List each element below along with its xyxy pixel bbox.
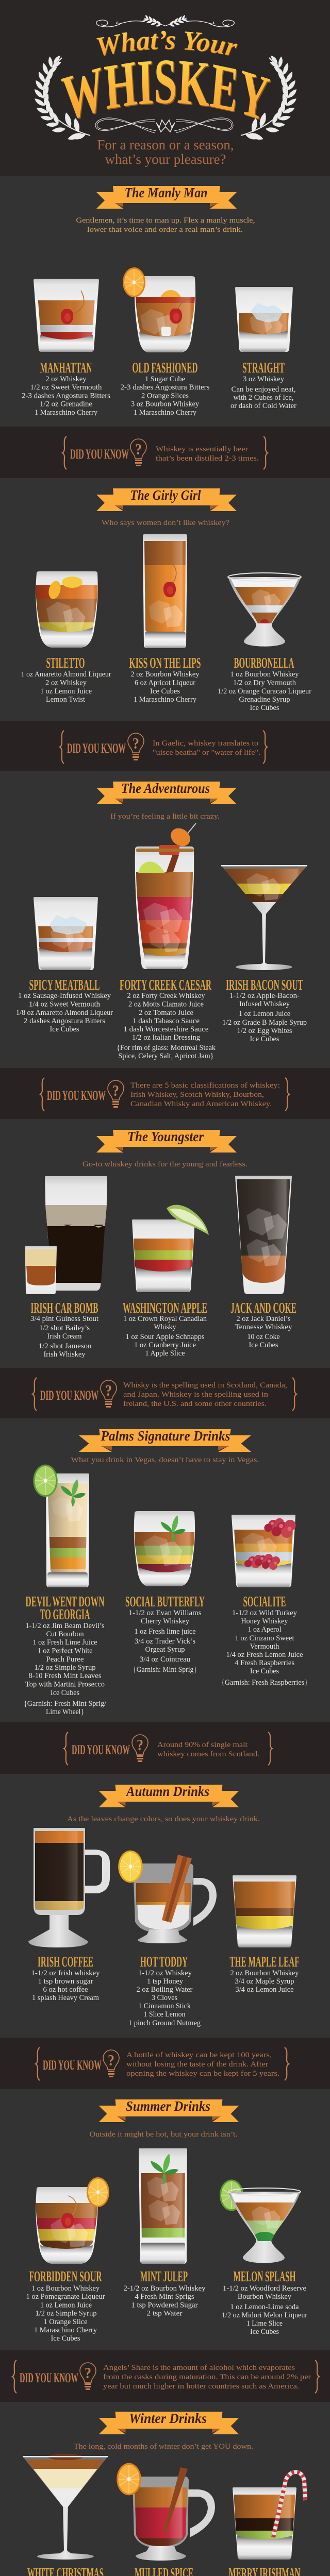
icon: Irish Bacon Sout glass [219,865,309,970]
icon: Social Butterfly glass [131,1511,199,1586]
subtitle: For a reason or a season, [97,137,234,152]
drink name: IRISH CAR BOMB [31,1300,98,1316]
callout: did you know 3 [0,1068,330,1119]
callout: did you know 5: ? [137,1736,143,1754]
panel: Winter Drinks [0,2402,330,2576]
ingredients: 1 oz Bourbon Whiskey [31,2284,100,2293]
callout: did you know 6: without losing the taste of the drink. After [126,2060,268,2069]
ingredients [218,670,311,712]
drink: Merry Irishman [221,2472,308,2576]
ingredients: 1 oz Lemon-Lime soda [230,2303,299,2311]
icon: Socialite glass [229,1515,296,1587]
callout: did you know 5: whiskey comes from Scotland. [157,1750,259,1758]
drink: Bourbonella [218,573,311,712]
ingredients: Ice Cubes [51,1689,79,1697]
ingredients [235,1315,292,1349]
panel: The Adventurous [16,782,307,1060]
title: WHISKEY: WHISKEY [61,60,271,120]
ingredients: Ice Cubes [250,1035,279,1043]
ingredients: 2 oz Motts Clamato Juice [128,1001,204,1009]
callout: did you know 6: A bottle of whiskey can be kept 100 years, [126,2051,272,2059]
ingredients: 2 oz Tomato Juice [139,1009,193,1017]
ingredients: 2 oz Forty Creek Whiskey [127,992,205,1000]
ingredients [31,1969,100,2002]
ingredients [222,992,307,1043]
ingredients: Vermouth [250,1642,279,1651]
callout: did you know 2 [0,721,330,771]
drink name: SOCIALITE [243,1594,286,1610]
callout: did you know 6: DID YOU KNOW [43,2058,102,2073]
callout: did you know 3: ? [112,1081,119,1099]
drink name: OLD FASHIONED [132,360,198,376]
ornament: lower flourish [95,118,233,133]
heading ribbon: The Girly Girl [130,487,201,503]
ingredients: 1/2 oz Orange Curacao Liqueur [218,687,311,696]
drink name: MANHATTAN [40,360,92,376]
ingredients: Ice Cubes [51,2334,80,2343]
ingredients: 2 dashes Angostura Bitters [24,1017,105,1025]
ingredients: Cut Bourbon [46,1630,84,1638]
ingredients: 1 oz Fresh Lime Juice [33,1638,97,1647]
ingredients: 2 oz Bourbon Whiskey [131,670,200,679]
icon: Straight glass [235,287,294,352]
ingredients [131,670,200,704]
ingredients: 1 splash Heavy Cream [32,1994,100,2002]
ingredients: 2-1/2 oz Bourbon Whiskey [124,2284,206,2293]
callout: did you know 6 [0,2038,330,2089]
icon: Devil Went Down glass [33,1465,93,1587]
ingredients: 1-1/2 oz Wild Turkey [232,1609,298,1617]
ingredients: 1 Maraschino Cherry [134,409,197,417]
ingredients: 1 oz Bourbon Whiskey [230,670,299,679]
callout: did you know 1: ? [135,440,142,458]
heading ribbon: Summer Drinks [126,2098,210,2114]
drink: Old Fashioned [121,267,210,417]
ingredients: 1-1/2 oz Jim Beam Devil’s [26,1622,105,1630]
ingredients: 1/2 oz Simple Syrup [34,1664,96,1672]
icon: Stiletto glass [36,571,98,648]
ingredients: Cherry Whiskey [141,1617,190,1625]
ingredients [21,670,111,704]
panel: The Manly Man [22,186,296,416]
drink: Irish Bacon Sout [219,865,309,1043]
ingredients: 1 Maraschino Cherry [134,696,197,704]
drink name: DEVIL WENT DOWN [26,1594,104,1610]
ingredients: 3/4 pint Guiness Stout [30,1315,98,1323]
icon: right laurel [241,55,298,142]
ingredients: 6 oz hot coffee [43,1986,88,1994]
icon: left laurel [33,55,90,142]
callout: did you know 5: Around 90% of single malt [157,1741,248,1749]
ingredients: 1 Cinnamon Stick [138,2002,191,2010]
panel: The Youngster [25,1130,296,1358]
ornament: top flourish [96,14,234,27]
drink: Melon Splash [220,2180,307,2336]
panel: header [0,0,330,176]
drink: Washington Apple [123,1205,209,1358]
ingredients: 1 oz Fresh lime juice [134,1628,196,1636]
drink: Irish Coffee [28,1828,110,2002]
panel: The Girly Girl [22,488,311,710]
ingredients: 1-1/2 oz Woodford Reserve [223,2284,306,2293]
ingredients: Infused Whiskey [239,1000,290,1008]
icon: Hot Toddy mug [118,1851,217,1943]
intro text: What you drink in Vegas, doesn’t have to stay in Vegas. [71,1456,259,1464]
ingredients: 1 dash Tabasco Sauce [133,1017,200,1025]
ingredients: 2 Orange Slices [141,392,189,400]
ingredients: Ice Cubes [150,687,180,696]
ingredients: Spice, Celery Salt, Apricot Jam} [119,1052,213,1060]
callout: did you know 4: DID YOU KNOW [40,1388,98,1403]
icon: Washington Apple glass [129,1205,209,1292]
heading ribbon: Palms Signature Drinks [101,1428,230,1444]
ingredients: 1 oz Pomegranate Liqueur [26,2293,105,2301]
ingredients: 1-1/2 oz Whiskey [138,1969,192,1977]
icon: Merry Irishman glass [232,2472,305,2560]
drink: Irish Car Bomb [25,1176,108,1359]
callout: did you know 4 [0,1368,330,1418]
ingredients: Ice Cubes [250,704,279,712]
ingredients: 1 tsp Powdered Sugar [131,2301,198,2309]
ingredients [22,375,110,417]
drink: Forbidden Sour [26,2177,109,2343]
callout: did you know 7: Angels’ Share is the amount of alcohol which evaporates [103,2364,295,2372]
ingredients: 3/4 oz Cointreau [140,1655,190,1664]
ingredients: 1 tsp brown sugar [38,1977,93,1986]
heading ribbon: The Youngster [127,1129,204,1144]
callout: did you know 1: Whiskey is essentially beer [156,445,248,453]
callout: did you know 7: year but much higher in hotter countries such as America. [103,2382,299,2391]
intro text: The long, cold months of winter don’t get YOU down. [74,2443,253,2451]
ingredients: 1 pinch Ground Nutmeg [128,2019,201,2027]
ingredients: 1 Apple Slice [145,1349,185,1358]
callout: did you know 7 [0,2350,330,2402]
ingredients: 2 oz Whiskey [45,375,87,383]
ingredients: 1/4 oz Fresh Lemon Juice [226,1651,303,1659]
ingredients: Irish Cream [47,1332,82,1341]
ingredients: 10 oz Coke [248,1333,279,1341]
callout: did you know 4: and Japan. Whiskey is the spelling used in [123,1391,269,1399]
subtitle: what’s your pleasure? [105,151,226,167]
ingredients: Ice Cubes [249,1341,278,1349]
drink name: SPICY MEATBALL [29,977,100,993]
ingredients: 1/4 oz Sweet Vermouth [29,1001,101,1009]
heading ribbon [79,1428,251,1452]
drink: Stiletto [21,571,111,704]
ingredients [121,375,210,417]
ingredients: {Garnish: Fresh Raspberries} [221,1679,308,1687]
ingredients [123,1315,207,1358]
drink name: MINT JULEP [140,2269,188,2285]
drink name: IRISH COFFEE [38,1954,93,1970]
intro text: lower that voice and order a real man’s drink. [87,226,243,234]
drink: Socialite [221,1515,308,1687]
heading ribbon [96,487,237,511]
ingredients: 2 tsp Water [146,2309,183,2317]
ingredients: 1/2 oz Grenadine [40,400,92,408]
heading ribbon [99,1784,239,1807]
ingredients: 3 oz Whiskey [243,375,285,383]
ingredients: 1 oz Lemon Juice [239,1010,290,1018]
icon: Irish Car Bomb glasses [25,1176,108,1294]
drink name: FORBIDDEN SOUR [29,2269,102,2285]
callout: did you know 1: DID YOU KNOW [70,447,129,462]
ingredients: 1 oz Aperol [248,1625,282,1634]
ingredients: 1 Maraschino Cherry [34,2326,97,2334]
drink name: FORTY CREEK CAESAR [120,977,211,993]
heading ribbon [96,781,237,804]
callout: did you know 7: from the casks during maturation. This can be around 2% per [103,2373,311,2381]
ingredients: 1/2 oz Midori Melon Liqueur [222,2311,307,2319]
ingredients: {Garnish: Mint Sprig} [133,1666,197,1674]
drink name [26,1594,104,1623]
drink: Social Butterfly [125,1511,205,1674]
icon: Forbidden Sour glass [31,2177,109,2264]
drink: Devil Went Down to Georgia [24,1465,107,1716]
ingredients: 1 oz Lemon Juice [40,2301,92,2309]
ingredients: 1 dash Worcesteshire Sauce [124,1025,208,1033]
icon: The Maple Leaf glass [232,1875,299,1947]
intro text [76,216,255,234]
ingredients: Top with Martini Prosecco [25,1681,105,1689]
callout: did you know 4: ? [105,1381,112,1399]
intro text: Go-to whiskey drinks for the young and fearless. [82,1160,248,1168]
callout: did you know 2: DID YOU KNOW [67,741,126,756]
ingredients: 8-10 Fresh Mint Leaves [29,1672,102,1680]
ingredients: 1 oz Perfect White [37,1647,93,1655]
icon: Spicy Meatball glass [31,897,101,970]
ingredients [24,1622,107,1716]
callout: did you know 1: that’s been distilled 2-3 times. [156,454,259,463]
drink: White Christmas [21,2454,111,2576]
ingredients: Orgeat Syrup [145,1646,185,1654]
ingredients [222,2284,307,2336]
heading ribbon: Autumn Drinks [125,1784,209,1799]
callout: did you know 3: Canadian Whisky and American Whiskey. [130,1100,272,1108]
ingredients: 1/2 oz Sweet Vermouth [30,383,102,392]
intro text: Who says women don’t like whiskey? [102,519,229,527]
heading ribbon: Winter Drinks [129,2411,207,2426]
panel: Summer Drinks [27,2099,307,2341]
ingredients: {Garnish: Fresh Mint Sprig/ [24,1700,107,1708]
drink name: HOT TODDY [140,1954,188,1970]
ingredients: 3/4 oz Trader Vick’s [135,1637,195,1646]
icon: Mulled Spice Cheribundi mug [117,2463,215,2561]
callout: did you know 4: Whisky is the spelling used in Scotland, Canada, [123,1381,287,1389]
drink name: STILETTO [46,655,85,671]
icon: Old Fashioned glass [123,267,199,352]
heading ribbon [96,1129,237,1153]
ingredients: 4 Fresh Mint Sprigs [135,2293,194,2301]
ingredients: Irish Whiskey [43,1350,86,1359]
ingredients: 1 oz Amaretto Almond Liqueur [21,670,111,679]
intro text: Gentlemen, it’s time to man up. Flex a manly muscle, [76,216,255,225]
ingredients: 1 oz Crown Royal Canadian [123,1315,207,1323]
ingredients: Ice Cubes [50,1025,79,1033]
ingredients [129,1609,202,1674]
intro text: Outside it might be hot, but your drink isn’t. [90,2130,237,2139]
callout: did you know 5: DID YOU KNOW [72,1742,130,1757]
ingredients: Ice Cubes [250,2328,279,2336]
callout: did you know 3: Irish Whiskey, Scotch Whisky, Bourbon, [130,1091,264,1099]
drink name: SOCIAL BUTTERFLY [125,1594,205,1610]
ingredients: Peach Puree [46,1655,84,1664]
callout: did you know 6: opening the whiskey can be kept for 5 years. [126,2070,279,2078]
ingredients: or dash of Cold Water [230,402,296,410]
ingredients: 1/2 oz Grade B Maple Syrup [222,1019,307,1027]
ingredients: 1/8 oz Amaretto Almond Liqueur [16,1009,113,1017]
ingredients: 1-1/2 oz Irish whiskey [31,1969,100,1977]
ingredients: 1/2 shot Jameson [38,1342,92,1350]
ingredients: Honey Whiskey [241,1617,288,1625]
ingredients: 3 oz Bourbon Whiskey [131,400,200,408]
drink name: WASHINGTON APPLE [123,1300,207,1316]
ingredients: Tennesse Whiskey [235,1323,292,1331]
title: What's Your: What’s Your [96,31,238,56]
callout: did you know 7: ? [85,2364,91,2382]
icon: Manhattan glass [31,279,103,352]
drink: Forty Creek Caesar [117,823,216,1060]
ingredients [26,2284,105,2343]
intro text: If you’re feeling a little bit crazy. [110,812,220,821]
ingredients: 1 Lime Slice [246,2319,283,2328]
ingredients: 1/2 shot Bailey’s [39,1324,90,1332]
panel: Autumn Drinks [28,1785,299,2027]
drink: Mint Julep [124,2148,206,2317]
ingredients: 1/2 oz Italian Dressing [132,1033,200,1042]
callout: did you know 3: There are 5 basic classifications of whiskey: [130,1081,280,1090]
icon: Melon Splash glass [220,2180,304,2263]
ingredients: 3 Cloves [152,1994,177,2002]
callout: did you know 5 [0,1722,330,1774]
ingredients: 1 oz Cinzano Sweet [235,1634,294,1642]
ingredients: 2-3 dashes Angostura Bitters [121,383,210,392]
icon: White Christmas glass [21,2454,111,2560]
ingredients: 1-1/2 oz Apple-Bacon- [229,992,300,1000]
icon: Irish Coffee glass [28,1828,110,1947]
ingredients: Lime Wheel} [46,1708,84,1716]
ingredients: 2-3 dashes Angostura Bitters [22,392,110,400]
icon: Mint Julep glass [139,2148,188,2264]
heading ribbon: The Adventurous [121,781,210,796]
subtitle [97,137,234,167]
ingredients: 3/4 oz Maple Syrup [235,1977,294,1986]
ingredients: Lemon Twist [46,696,85,704]
ingredients: 2 oz Whiskey [45,679,87,687]
drink: The Maple Leaf [230,1875,299,1994]
callout: did you know 6: ? [108,2051,114,2069]
callout: did you know 1 [0,427,330,478]
ingredients: with 2 Cubes of Ice, [233,394,294,402]
ingredients: Whisky [154,1323,176,1331]
ingredients [16,992,113,1033]
ingredients [117,992,216,1060]
callout: did you know 4: Ireland, the U.S. and some other countries. [123,1400,267,1408]
ingredients [230,1969,299,1994]
heading ribbon [96,185,237,209]
ingredients: {For rim of glass: Montreal Steak [117,1044,216,1052]
callout: did you know 2: "uisce beatha" or "water of life". [153,749,260,757]
drink: Straight [230,287,296,410]
ingredients: 1 Orange Slice [43,2318,88,2326]
ingredients: 2 oz Boiling Water [136,1986,193,1994]
icon: Bourbonella glass [227,573,304,647]
ingredients: 1 oz Lemon Juice [40,687,92,696]
ingredients: 1-1/2 oz Evan Williams [129,1609,202,1617]
ingredients: 1 Sugar Cube [145,375,185,383]
drink name: KISS ON THE LIPS [129,655,201,671]
drink name: TO GEORGIA [40,1607,90,1623]
ingredients: Bourbon Whiskey [238,2293,292,2301]
ingredients: 1/2 oz Simple Syrup [35,2309,97,2317]
drink: Spicy Meatball [16,897,113,1033]
callout: did you know 2: In Gaelic, whiskey translates to [153,739,258,748]
callout: did you know 7: DID YOU KNOW [20,2370,78,2385]
heading ribbon [99,2098,239,2122]
heading ribbon [99,2411,239,2434]
ingredients: 1 oz Sour Apple Schnapps [126,1333,205,1341]
callout: did you know 3: DID YOU KNOW [47,1088,106,1103]
icon: Jack and Coke glass [235,1176,294,1294]
ingredients: 1/2 oz Dry Vermouth [233,679,296,687]
ingredients [230,375,296,410]
ingredients: 1/2 oz Egg Whites [237,1027,292,1035]
ingredients: 1 Maraschino Cherry [35,409,98,417]
ingredients: 2 oz Bourbon Whiskey [230,1969,299,1977]
drink: Manhattan [22,279,110,417]
icon: Forty Creek Caesar glass [131,823,199,969]
ingredients: 2 oz Jack Daniel’s [236,1315,291,1323]
callout: did you know 2: ? [133,734,139,752]
ingredients: 3/4 oz Lemon Juice [235,1986,294,1994]
drink: Hot Toddy [118,1851,217,2027]
ingredients [128,1969,201,2027]
drink: Jack and Coke [230,1176,296,1349]
panel: Palms Signature Drinks [24,1429,307,1716]
drink: Kiss on the Lips [129,534,201,704]
ingredients: Can be enjoyed neat, [231,385,296,394]
ingredients: Grenadine Syrup [239,696,290,704]
ingredients: 4 Fresh Raspberries [235,1659,294,1667]
ingredients: 6 oz Apricot Liqueur [135,679,195,687]
drink: Mulled Spice Cheribundi [117,2463,215,2576]
drink name: STRAIGHT [242,360,285,376]
ingredients [30,1315,98,1359]
heading ribbon: The Manly Man [125,185,207,200]
ingredients: 1 tsp Honey [147,1977,184,1986]
icon: Kiss on the Lips glass [142,534,188,648]
ingredients [221,1609,308,1687]
ingredients [124,2284,206,2317]
ingredients: 1 oz Sausage-Infused Whiskey [18,992,111,1000]
ingredients: Ice Cubes [250,1667,279,1675]
ingredients: 1 Slice Lemon [143,2010,186,2019]
intro text: As the leaves change colors, so does your whiskey drink. [67,1815,260,1823]
ingredients: 1 oz Cranberry Juice [134,1341,196,1349]
